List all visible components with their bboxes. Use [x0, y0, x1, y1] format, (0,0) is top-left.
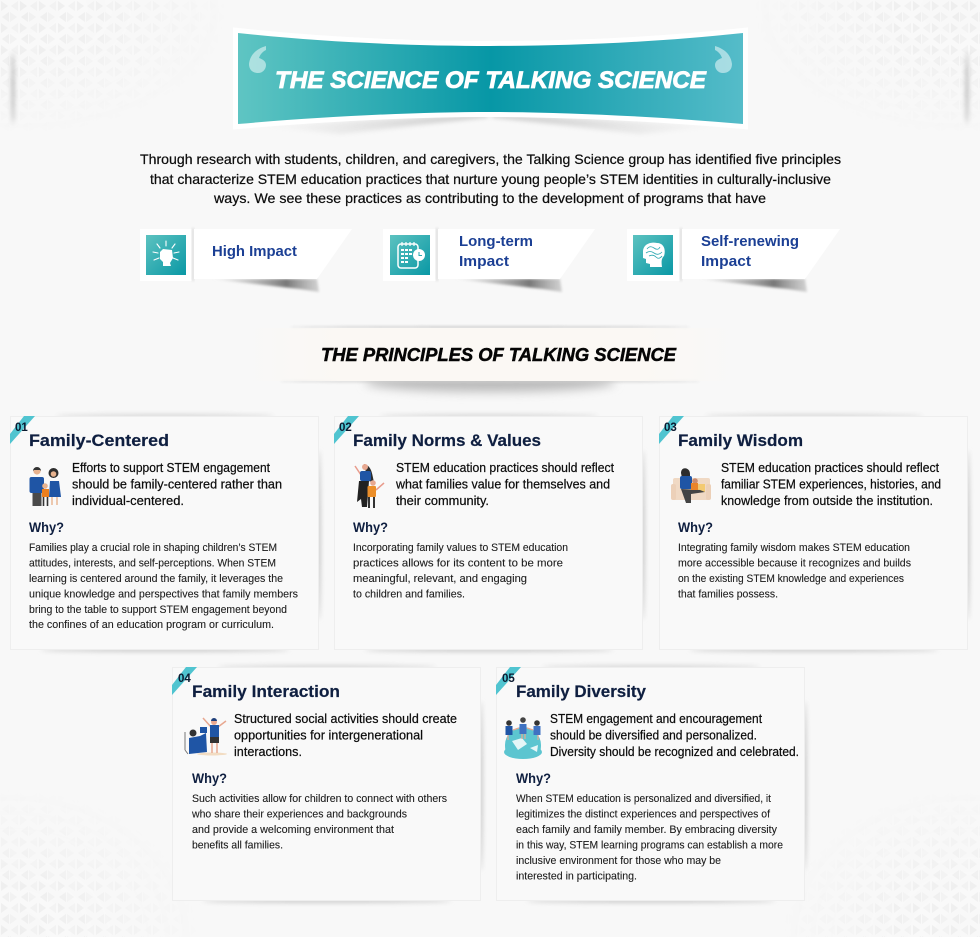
icon: reading on sofa — [671, 468, 711, 503]
why explanation: that families possess. — [678, 588, 778, 600]
lead statement: should be family-centered rather than — [72, 478, 282, 492]
lead statement — [721, 461, 941, 508]
why explanation — [353, 542, 568, 600]
icon: mother and child — [355, 464, 384, 508]
number ribbon: 03 — [664, 422, 677, 434]
why explanation: meaningful, relevant, and engaging — [353, 573, 527, 585]
icon: notepad and clock — [390, 235, 430, 275]
lead statement: STEM education practices should reflect — [396, 461, 614, 475]
why explanation — [516, 793, 783, 882]
why explanation: more accessible because it recognizes and builds — [678, 558, 911, 570]
intro paragraph — [140, 152, 841, 206]
why explanation: inclusive environment for those who may be — [516, 855, 721, 867]
why explanation: attitudes, interests, and self-perceptions. When STEM — [29, 558, 276, 570]
lead statement — [395, 461, 614, 508]
badge label: Impact — [459, 254, 509, 270]
why explanation: When STEM education is personalized and diversified, it — [516, 793, 771, 805]
icon: raised fist — [146, 235, 186, 275]
why explanation — [678, 542, 911, 600]
number ribbon — [10, 416, 35, 444]
title banner — [238, 33, 743, 134]
why explanation: learning is centered around the family, it leverages the — [29, 573, 283, 585]
panel: 03 Family Wisdom — [659, 414, 970, 652]
card title: Family Interaction — [192, 682, 340, 701]
why explanation — [191, 793, 447, 852]
panel: 05 Family Diversity — [496, 666, 806, 902]
impact badge: Self-renewing Impact — [627, 228, 840, 292]
lead statement — [550, 712, 799, 759]
icon: family of three — [30, 467, 61, 506]
why explanation: and provide a welcoming environment that — [192, 824, 394, 836]
number ribbon — [659, 416, 684, 444]
lead statement: Diversity should be recognized and celebrated. — [550, 745, 799, 759]
icon: photographing a child — [185, 718, 227, 756]
intro paragraph: that characterize STEM education practices that nurture young people’s STEM identities in culturally-inclusive — [150, 172, 831, 187]
lead statement: knowledge from outside the institution. — [721, 494, 933, 508]
section heading text: THE PRINCIPLES OF TALKING SCIENCE — [321, 345, 677, 365]
impact badge: High Impact — [140, 228, 352, 292]
impact badge: Long-term Impact — [383, 228, 595, 292]
card title: Family Wisdom — [678, 431, 803, 450]
badge label: Long-term — [459, 234, 533, 250]
why explanation: each family and family member. By embracing diversity — [516, 824, 778, 836]
number ribbon — [334, 416, 359, 444]
why explanation: Such activities allow for children to connect with others — [192, 793, 447, 805]
icon: left quote mark — [249, 46, 266, 73]
card title: Family-Centered — [29, 431, 169, 450]
icon: head with brain — [633, 235, 673, 275]
lead statement: STEM education practices should reflect — [721, 461, 939, 475]
title text: THE SCIENCE OF TALKING SCIENCE — [275, 67, 707, 94]
intro paragraph: ways. We see these practices as contributing to the development of programs that have — [213, 191, 766, 206]
panel: 04 Family Interaction — [172, 666, 482, 902]
section heading band — [240, 326, 740, 392]
lead statement: their community. — [396, 494, 489, 508]
lead statement — [234, 712, 457, 759]
why heading: Why? — [516, 770, 551, 786]
number ribbon — [496, 667, 521, 695]
why explanation: who share their experiences and backgrounds — [191, 808, 407, 820]
lead statement — [72, 461, 282, 508]
badge label — [459, 234, 533, 270]
icon: right quote mark — [715, 46, 732, 73]
lead statement: familiar STEM experiences, histories, and — [721, 478, 941, 492]
why heading: Why? — [678, 519, 713, 535]
lead statement: STEM engagement and encouragement — [550, 712, 762, 726]
why explanation: Integrating family wisdom makes STEM education — [678, 542, 910, 554]
badge label: Impact — [701, 254, 751, 270]
why explanation: Families play a crucial role in shaping children’s STEM — [29, 542, 277, 554]
panel: 01 Family-Centered — [10, 414, 320, 652]
why heading: Why? — [29, 519, 64, 535]
why explanation: unique knowledge and perspectives that family members — [29, 588, 298, 600]
why explanation: on the existing STEM knowledge and experiences — [678, 573, 904, 585]
card title: Family Diversity — [516, 682, 647, 701]
lead statement: what families value for themselves and — [395, 478, 610, 492]
lead statement: Structured social activities should create — [234, 712, 457, 726]
lead statement: Efforts to support STEM engagement — [72, 461, 270, 475]
why explanation: legitimizes the distinct experiences and perspectives of — [516, 808, 770, 820]
number ribbon: 01 — [15, 422, 28, 434]
number ribbon: 02 — [339, 422, 352, 434]
why heading: Why? — [353, 519, 388, 535]
why explanation — [29, 542, 298, 631]
lead statement: interactions. — [234, 745, 302, 759]
why explanation: the confines of an education program or curriculum. — [29, 619, 274, 631]
why heading: Why? — [192, 770, 227, 786]
why explanation: in this way, STEM learning programs can establish a more — [516, 840, 783, 852]
why explanation: bring to the table to support STEM engagement beyond — [29, 604, 287, 616]
why explanation: practices allows for its content to be more — [353, 558, 563, 570]
lead statement: individual-centered. — [72, 494, 184, 508]
lead statement: opportunities for intergenerational — [234, 728, 423, 742]
why explanation: to children and families. — [353, 588, 465, 600]
number ribbon — [172, 667, 197, 695]
badge label: High Impact — [212, 244, 297, 260]
card title: Family Norms & Values — [353, 431, 541, 450]
panel: 02 Family Norms & Values — [334, 414, 644, 652]
badge label: Self-renewing — [701, 234, 799, 250]
lead statement: should be diversified and personalized. — [550, 728, 757, 742]
why explanation: benefits all families. — [192, 840, 283, 852]
icon: children on a globe — [504, 717, 542, 759]
badge label — [701, 234, 799, 270]
why explanation: interested in participating. — [516, 870, 637, 882]
number ribbon: 05 — [502, 673, 515, 685]
intro paragraph: Through research with students, children, and caregivers, the Talking Science group has identified five principles — [140, 152, 841, 167]
why explanation: Incorporating family values to STEM education — [353, 542, 568, 554]
number ribbon: 04 — [178, 673, 191, 685]
